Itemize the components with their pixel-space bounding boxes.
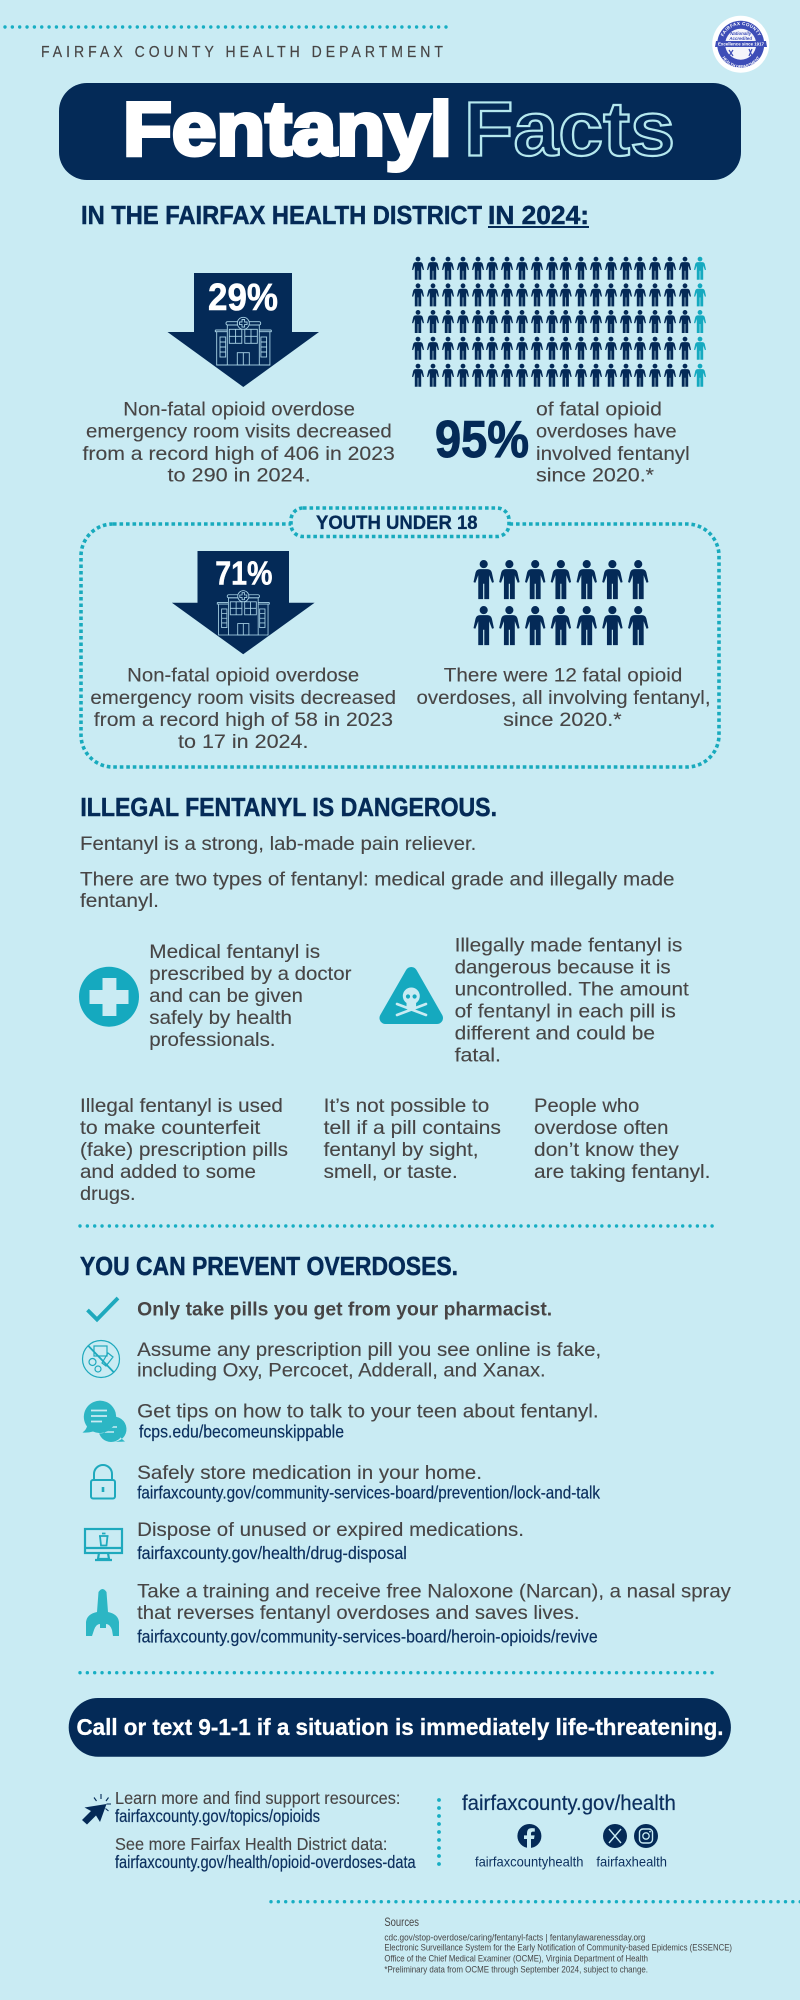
item: dispose of medications: fairfaxcounty.gov/health/drug-disposal xyxy=(137,1543,407,1563)
website link: fairfaxcounty.gov/health xyxy=(462,1792,676,1815)
intro text: Fentanyl is a strong, lab-made pain reliever. xyxy=(80,834,476,855)
sources: cdc.gov/stop-overdose/caring/fentanyl-facts | fentanylawarenessday.org xyxy=(384,1933,645,1944)
text column: cannot detect xyxy=(324,1096,501,1183)
text column: counterfeit pills: drugs. xyxy=(80,1184,136,1205)
description: to 290 in 2024. xyxy=(168,466,311,487)
text column: counterfeit pills: and added to some xyxy=(80,1162,256,1183)
description: youth fatal overdoses: There were 12 fatal opioid xyxy=(444,666,682,687)
icon: X xyxy=(603,1824,627,1848)
description: Non-fatal opioid overdose xyxy=(123,400,355,421)
text column: counterfeit pills: (fake) prescription pills xyxy=(80,1140,288,1161)
text: medical fentanyl xyxy=(149,942,352,1051)
icon: check mark xyxy=(88,1298,118,1320)
text: including Oxy, Percocet, Adderall, and Xanax. xyxy=(137,1361,546,1382)
sources xyxy=(384,1917,732,1976)
icon: skull warning triangle xyxy=(386,973,437,1018)
description: involved fentanyl xyxy=(536,444,690,465)
text: see more data: See more Fairfax Health District data: xyxy=(115,1834,387,1854)
text: Only take pills you get from your pharmacist. xyxy=(137,1300,552,1321)
icon: Instagram xyxy=(634,1824,658,1848)
panel: youth under 18 xyxy=(81,508,719,767)
item: naloxone training xyxy=(86,1582,731,1647)
text: learn more: fairfaxcounty.gov/topics/opioids xyxy=(115,1806,320,1826)
item: only take pills from pharmacist xyxy=(88,1298,552,1321)
description: youth fatal overdoses: since 2020.* xyxy=(503,710,622,731)
text column: counterfeit pills: to make counterfeit xyxy=(80,1118,261,1139)
text: see more data: fairfaxcounty.gov/health/opioid-overdoses-data xyxy=(115,1852,416,1872)
description: youth fatal overdoses: overdoses, all involving fentanyl, xyxy=(416,688,710,709)
text column: people who overdose: are taking fentanyl. xyxy=(534,1162,710,1183)
text: illegally made fentanyl: Illegally made fentanyl is xyxy=(455,935,682,956)
label pill: youth under 18 xyxy=(291,508,509,536)
text: see more data xyxy=(115,1834,416,1872)
text column: counterfeit pills xyxy=(80,1096,288,1205)
panel: 95% of fatal overdoses xyxy=(412,257,706,487)
text: illegally made fentanyl: uncontrolled. The amount xyxy=(455,979,690,1000)
top dotted divider xyxy=(5,25,447,29)
description: of fatal opioid xyxy=(536,400,662,421)
title: Fentanyl: Fentanyl xyxy=(123,87,452,172)
text and link xyxy=(137,1582,731,1647)
logo: health department seal: Accredited xyxy=(728,36,752,41)
text: medical fentanyl: professionals. xyxy=(149,1030,276,1051)
item: talk to your teen: fcps.edu/becomeunskippable xyxy=(139,1421,344,1441)
text column: people who overdose: People who xyxy=(534,1096,639,1117)
heading: you can prevent overdoses: YOU CAN PREVENT OVERDOSES. xyxy=(80,1253,458,1281)
icon: facebook xyxy=(517,1824,541,1848)
intro text: fentanyl. xyxy=(80,891,159,912)
text and link: fairfaxcounty.gov/community-services-board/heroin-opioids/revive xyxy=(137,1627,598,1647)
text xyxy=(137,1340,601,1382)
social: facebook xyxy=(475,1824,583,1870)
handle: fairfaxcountyhealth xyxy=(475,1854,583,1870)
logo: health department seal: HEALTH DEPARTMENT xyxy=(722,56,760,68)
logo: health department seal: FAIRFAX COUNTY xyxy=(720,22,762,36)
text: learn more xyxy=(115,1788,400,1826)
icon: no pills xyxy=(82,1340,120,1378)
text column: people who overdose: don’t know they xyxy=(534,1140,679,1161)
text: illegally made fentanyl: different and could be xyxy=(455,1023,655,1044)
description: youth ER visits: from a record high of 58 in 2023 xyxy=(94,710,393,731)
item: dispose of medications xyxy=(85,1520,524,1563)
callout: call 9-1-1: Call or text 9-1-1 if a situation is immediately life-threatening. xyxy=(76,1714,724,1740)
logo: health department seal: Excellence since 1917 xyxy=(718,42,764,47)
text and link: Dispose of unused or expired medications. xyxy=(137,1520,524,1541)
sources: Sources xyxy=(384,1917,419,1929)
text: illegally made fentanyl xyxy=(455,935,690,1066)
icon: chat bubbles xyxy=(82,1400,126,1442)
text column: people who overdose xyxy=(534,1096,710,1183)
description: from a record high of 406 in 2023 xyxy=(82,444,395,465)
heading: in the Fairfax Health District in 2024: IN 2024: xyxy=(488,202,589,230)
text: medical fentanyl: Medical fentanyl is xyxy=(149,942,320,963)
text column: cannot detect: fentanyl by sight, xyxy=(324,1140,478,1161)
description: since 2020.* xyxy=(536,466,655,487)
text and link: Get tips on how to talk to your teen about fentanyl. xyxy=(137,1401,599,1422)
item: fake pills online xyxy=(82,1340,601,1382)
arrow with hospital icon xyxy=(172,551,315,654)
description: emergency room visits decreased xyxy=(86,422,392,443)
pictogram: 12 people xyxy=(474,560,648,645)
text: learn more: Learn more and find support resources: xyxy=(115,1788,400,1808)
department name: FAIRFAX COUNTY HEALTH DEPARTMENT xyxy=(41,44,447,61)
stat: 29%: 29% xyxy=(208,277,278,319)
icon: cursor click xyxy=(82,1794,111,1824)
dotted outline xyxy=(81,524,719,767)
item: safely store medication: fairfaxcounty.gov/community-services-board/prevention/lock-and-talk xyxy=(137,1483,600,1503)
text: medical fentanyl: safely by health xyxy=(149,1008,292,1029)
handle: fairfaxhealth xyxy=(596,1854,667,1870)
text column: counterfeit pills: Illegal fentanyl is used xyxy=(80,1096,283,1117)
description: youth ER visits: emergency room visits decreased xyxy=(90,688,396,709)
description xyxy=(536,400,690,487)
title banner xyxy=(59,83,741,180)
item: talk to your teen xyxy=(82,1400,599,1442)
description: youth fatal overdoses xyxy=(416,666,710,731)
text column: cannot detect: smell, or taste. xyxy=(324,1162,458,1183)
text column: cannot detect: tell if a pill contains xyxy=(324,1118,501,1139)
logo: health department seal xyxy=(712,16,770,73)
intro text: There are two types of fentanyl: medical grade and illegally made xyxy=(80,869,674,890)
text: medical fentanyl: and can be given xyxy=(149,986,303,1007)
icon: nasal spray xyxy=(86,1589,119,1636)
text column: people who overdose: overdose often xyxy=(534,1118,668,1139)
heading: illegal fentanyl is dangerous: ILLEGAL FENTANYL IS DANGEROUS. xyxy=(80,794,497,822)
heading: in the Fairfax Health District in 2024: IN THE FAIRFAX HEALTH DISTRICT xyxy=(81,202,482,230)
callout: call 9-1-1 xyxy=(69,1698,731,1757)
pictogram: 100 people, 95 highlighted as navy xyxy=(412,257,706,387)
text column: cannot detect: It’s not possible to xyxy=(324,1096,489,1117)
logo: health department seal: Nationally xyxy=(730,31,752,36)
sources: *Preliminary data from OCME through September 2024, subject to change. xyxy=(384,1965,648,1976)
description: youth ER visits: to 17 in 2024. xyxy=(178,732,308,753)
stat: 95%: 95% xyxy=(435,411,529,469)
social: X and Instagram xyxy=(596,1824,667,1870)
arrow with hospital icon xyxy=(168,273,319,387)
text and link: that reverses fentanyl overdoses and saves lives. xyxy=(137,1603,579,1624)
sources: Office of the Chief Medical Examiner (OCME), Virginia Department of Health xyxy=(384,1954,648,1965)
text: illegally made fentanyl: of fentanyl in each pill is xyxy=(455,1001,676,1022)
description: youth ER visits: Non-fatal opioid overdose xyxy=(127,666,359,687)
description xyxy=(82,400,395,487)
text: illegally made fentanyl: fatal. xyxy=(455,1045,501,1066)
text: medical fentanyl: prescribed by a doctor xyxy=(149,964,352,985)
description: overdoses have xyxy=(536,422,677,443)
item: safely store medication xyxy=(91,1463,600,1503)
intro text xyxy=(80,834,674,912)
title: Facts: Facts xyxy=(464,86,675,172)
stat: 71%: 71% xyxy=(215,554,272,591)
icon: computer with bin xyxy=(85,1529,122,1560)
description: youth ER visits xyxy=(90,666,396,753)
sources: Electronic Surveillance System for the Early Notification of Community-based Epidemics (ESSENCE) xyxy=(384,1943,732,1954)
icon: medical cross xyxy=(79,967,139,1027)
label pill: youth under 18: YOUTH UNDER 18 xyxy=(316,512,478,534)
text: illegally made fentanyl: dangerous because it is xyxy=(455,957,671,978)
panel: 29% emergency room decrease xyxy=(82,273,395,487)
text and link: Safely store medication in your home. xyxy=(137,1463,482,1484)
text and link: Take a training and receive free Naloxone (Narcan), a nasal spray xyxy=(137,1582,731,1603)
text: Assume any prescription pill you see online is fake, xyxy=(137,1340,601,1361)
icon: padlock xyxy=(91,1465,115,1498)
